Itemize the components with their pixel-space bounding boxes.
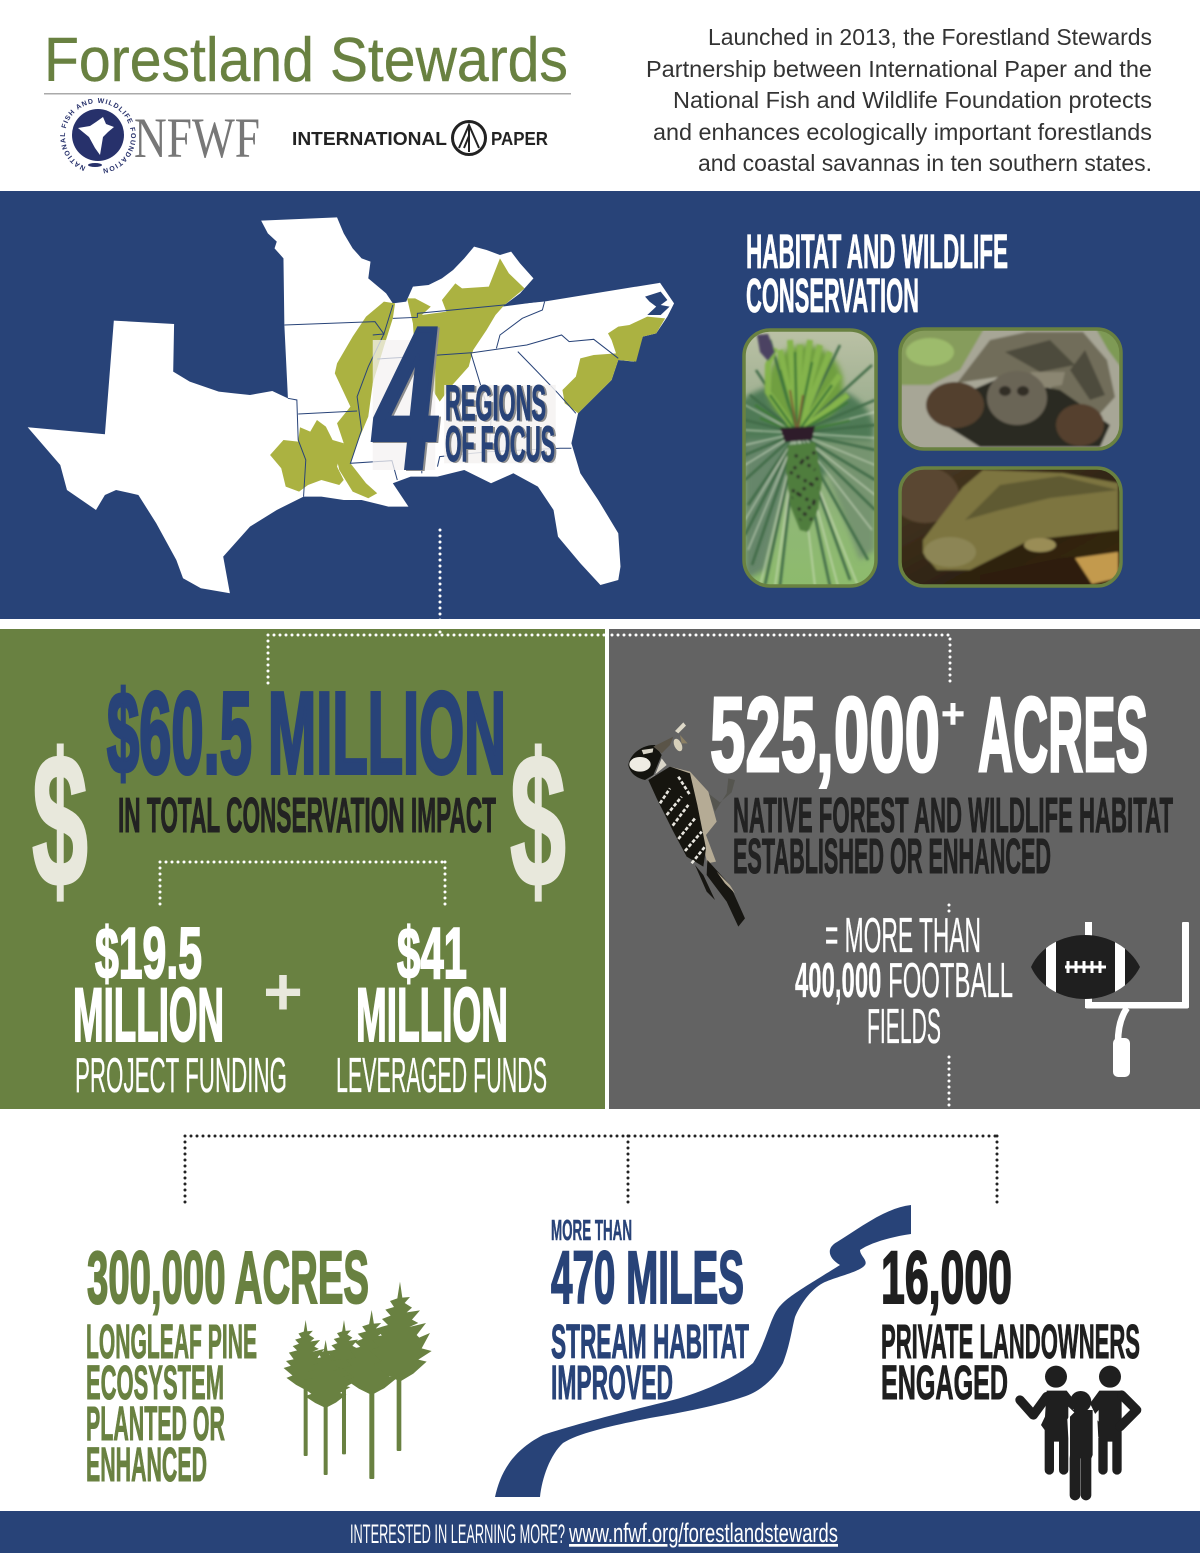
stat: longleaf pine acres: 300,000 ACRES [87,1236,369,1319]
map: focus regions [270,258,665,498]
photo: gopher tortoise [898,327,1123,451]
logo: International Paper: INTERNATIONAL [292,129,447,149]
logo: International Paper: PAPER [491,129,548,149]
callout: 4 regions of focus: 4 [364,285,452,510]
stat: private landowners: ENGAGED [881,1357,1008,1410]
acres headline: 525,000 [710,676,940,794]
logo: NFWF: NFWF [134,107,260,170]
football fields comparison: = MORE THAN [825,909,981,963]
stat: stream miles: 470 MILES [551,1236,744,1319]
stat: longleaf pine acres: ECOSYSTEM [86,1357,224,1410]
logo: NFWF: NATIONAL FISH AND WILDLIFE FOUNDATION [60,98,136,174]
panel: habitat map band [0,191,1200,619]
bottom dotted connectors [185,1136,997,1208]
stat: stream miles: MORE THAN [551,1215,632,1247]
football fields comparison: FIELDS [867,1000,941,1054]
logo: International Paper [292,122,548,154]
heading: habitat and wildlife conservation [746,226,1008,323]
acres description [733,789,1173,884]
stat: longleaf pine acres: PLANTED OR [86,1398,225,1451]
intro text block: Launched in 2013, the Forestland Stewards [708,24,1152,50]
stat: longleaf pine acres: ENHANCED [86,1439,207,1492]
plus sign: + [263,954,303,1030]
map of southern states [28,217,674,593]
stat: stream miles [551,1215,749,1410]
stat: private landowners [881,1236,1140,1410]
footer [0,1511,1200,1553]
leveraged funds figure [336,914,547,1103]
dotted connectors [160,530,950,1109]
intro text block: and coastal savannas in ten southern states. [698,150,1152,176]
callout: 4 regions of focus [364,285,555,510]
project funding figure: MILLION [73,973,224,1058]
logo: NFWF [60,98,260,174]
acres headline: + [941,690,965,737]
intro text block: Partnership between International Paper and the [646,56,1152,82]
intro text block [646,24,1152,176]
header: title and partner logos [44,26,571,174]
project funding figure: $19.5 [95,914,202,994]
icon: football and goalpost [1028,922,1189,1077]
football fields comparison [795,909,1013,1054]
leveraged funds figure: MILLION [356,973,508,1058]
stat: longleaf pine acres [86,1236,369,1492]
photo: longleaf pine [742,328,878,588]
title: Forestland Stewards [44,26,568,95]
icon: left dollar sign: $ [32,715,88,927]
map land [28,217,674,593]
text: REGIONS [445,375,546,431]
icon: people [1020,1366,1137,1500]
panel: acres [609,629,1200,1109]
photo: hellbender salamander [891,466,1123,590]
stat: stream miles: IMPROVED [551,1357,673,1410]
text: IN TOTAL CONSERVATION IMPACT [118,789,496,843]
text: $60.5 MILLION [107,668,506,798]
text: PROJECT FUNDING [75,1049,287,1103]
funding total [107,668,506,843]
map: state lines [284,282,660,497]
text: STREAM HABITAT [551,1316,749,1369]
panel: funding [0,629,605,1109]
stat: longleaf pine acres: LONGLEAF PINE [86,1316,257,1369]
icon: right dollar sign: $ [510,715,566,927]
heading: habitat and wildlife conservation: CONSERVATION [746,270,919,323]
text: OF FOCUS [445,416,555,472]
icon: pine trees [284,1282,432,1479]
intro text block: National Fish and Wildlife Foundation protects [673,87,1152,113]
footer: www.nfwf.org/forestlandstewards [568,1518,838,1548]
stat: private landowners: 16,000 [881,1236,1012,1319]
text: LEVERAGED FUNDS [336,1049,547,1103]
map: Albemarle sound [645,292,670,315]
icon: red-cockaded woodpecker [628,722,745,927]
icon: stream ribbon [495,1205,911,1497]
footer: INTERESTED IN LEARNING MORE? [350,1519,565,1549]
football fields comparison: 400,000 FOOTBALL [795,954,1013,1008]
project funding figure [73,914,287,1103]
leveraged funds figure: $41 [397,914,467,994]
intro text block: and enhances ecologically important forestlands [653,119,1152,145]
